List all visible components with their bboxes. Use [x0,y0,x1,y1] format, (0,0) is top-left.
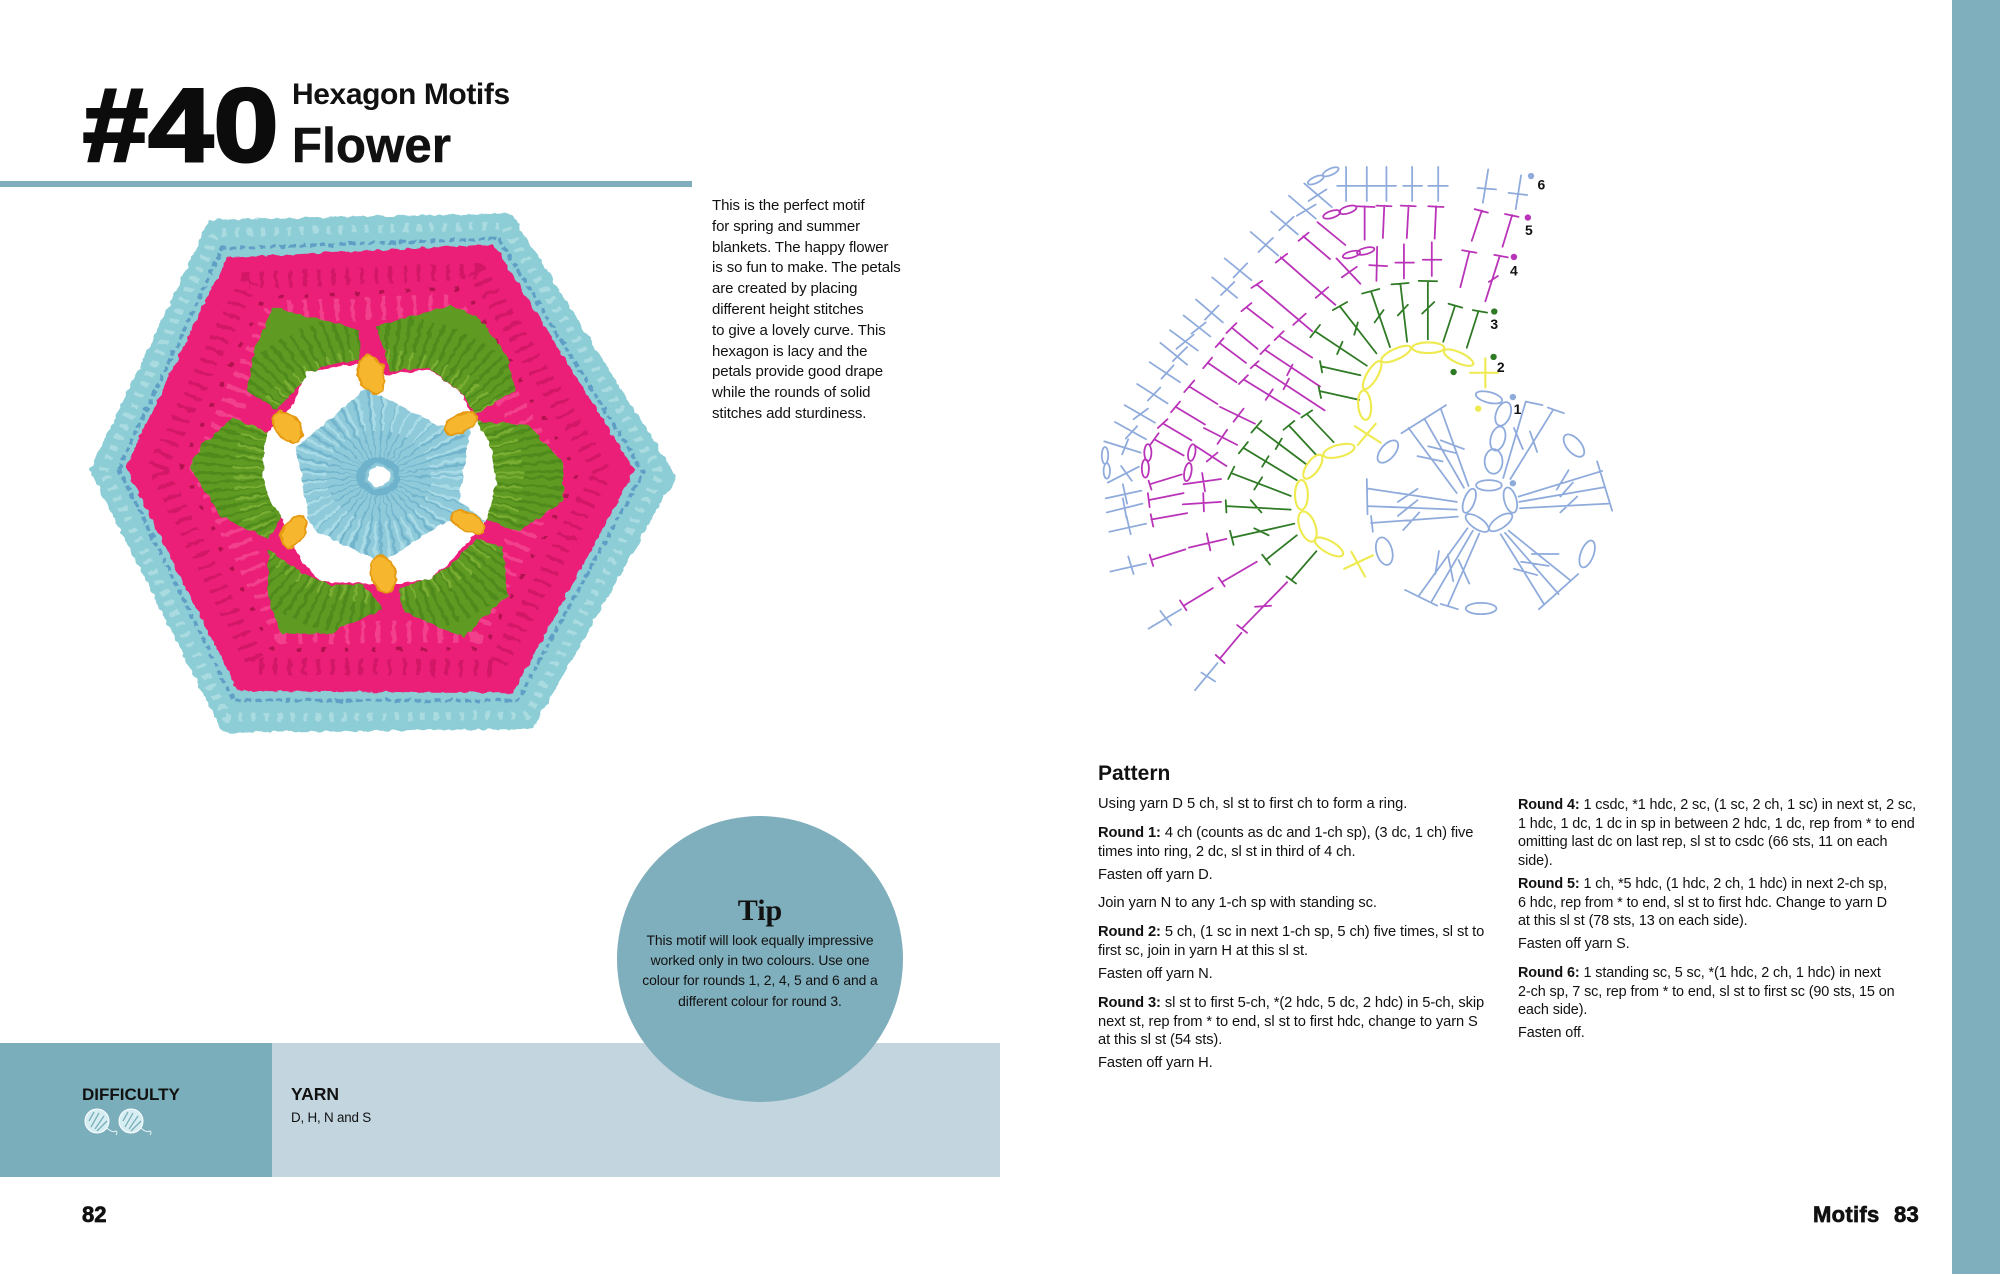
intro text: This is the perfect motif [712,197,865,214]
yellow knots [268,354,489,595]
green petals [190,305,563,638]
icon: yarn balls [84,1108,152,1136]
yarn list: D, H, N and S [291,1110,371,1125]
round 6 [1518,965,1895,1018]
intro text: while the rounds of solid [712,384,870,401]
yarn panel [272,1043,1000,1177]
round 6: each side). [1518,1002,1587,1018]
fasten off N: Fasten off yarn N. [1098,966,1213,982]
outer blue round [94,217,672,730]
round 1: times into ring, 2 dc, sl st in third of 4 ch. [1098,844,1355,860]
pattern column 2 [1518,797,1916,1041]
difficulty panel [0,1043,272,1177]
round 6: 2-ch sp, 7 sc, rep from * to end, sl st to first sc (90 sts, 15 on [1518,984,1895,1000]
round 3: Round 3: sl st to first 5-ch, *(2 hdc, 5 dc, 2 hdc) in 5-ch, skip [1098,995,1484,1011]
fasten off D: Fasten off yarn D. [1098,867,1213,883]
tip text: worked only in two colours. Use one [651,952,869,968]
round 2: Round 2: 5 ch, (1 sc in next 1-ch sp, 5 ch) five times, sl st to [1098,924,1484,940]
foundation: Using yarn D 5 ch, sl st to first ch to form a ring. [1098,796,1407,812]
join N: Join yarn N to any 1-ch sp with standing sc. [1098,895,1377,911]
round 3 stitches: green [1226,281,1487,584]
round 2: first sc, join in yarn H at this sl st. [1098,943,1308,959]
round 4: 1 hdc, 1 dc, 1 dc in sp in between 2 hdc, 1 dc, rep from * to end [1518,816,1915,832]
footer section and page number right: Motifs 83 [1813,1202,1919,1227]
round 5: at this sl st (78 sts, 13 on each side). [1518,913,1748,929]
round 3 [1098,995,1484,1048]
intro text: is so fun to make. The petals [712,259,901,276]
fasten off S: Fasten off yarn S. [1518,936,1630,952]
photo: crocheted hexagon motif [88,212,676,734]
round start markers and numbers: 3 [1490,316,1498,332]
heading rule [0,181,692,187]
pattern column 1 [1098,796,1484,1071]
motif number: #40 [83,68,279,184]
round 4: Round 4: 1 csdc, *1 hdc, 2 sc, (1 sc, 2 ch, 1 sc) in next st, 2 sc, [1518,797,1916,813]
fasten off H: Fasten off yarn H. [1098,1055,1213,1071]
intro text: for spring and summer [712,218,860,235]
round 5: Round 5: 1 ch, *5 hdc, (1 hdc, 2 ch, 1 hdc) in next 2-ch sp, [1518,876,1887,892]
rounds 4 and 5 stitches: magenta [1142,204,1519,663]
intro text [712,197,901,422]
intro text: petals provide good drape [712,363,883,380]
tip text [642,932,878,1009]
round 3: next st, rep from * to end, sl st to first hdc, change to yarn S [1098,1014,1478,1030]
round 3: at this sl st (54 sts). [1098,1032,1222,1048]
difficulty label: DIFFICULTY [82,1085,180,1104]
round 5 [1518,876,1887,929]
round start markers and numbers: 6 [1538,177,1546,192]
intro text: hexagon is lacy and the [712,343,867,360]
yarn label: YARN [291,1084,339,1104]
round 4 [1518,797,1916,869]
blue centre star [296,391,487,562]
round start markers and numbers: 1 [1514,401,1522,417]
crochet chart diagram [1100,166,1613,692]
round 2 stitches: yellow [1295,342,1498,576]
tip heading: Tip [738,894,782,927]
tip circle [617,816,903,1102]
round 6 and round 1 stitches: blue [1102,165,1612,690]
round 2 [1098,924,1484,959]
fasten off: Fasten off. [1518,1025,1585,1041]
round 1 [1098,825,1473,860]
motif title: Flower [292,119,451,173]
right edge colour strip [1952,0,2000,1274]
category heading: Hexagon Motifs [292,78,510,111]
round 6: Round 6: 1 standing sc, 5 sc, *(1 hdc, 2 ch, 1 hdc) in next [1518,965,1881,981]
intro text: different height stitches [712,301,864,318]
round start markers and numbers: 2 [1497,359,1505,375]
tip text: colour for rounds 1, 2, 4, 5 and 6 and a [642,972,878,988]
intro text: are created by placing [712,280,857,297]
pink rounds [125,244,635,693]
round start markers and numbers: 4 [1510,262,1518,278]
intro text: stitches add sturdiness. [712,405,866,422]
round 1: Round 1: 4 ch (counts as dc and 1-ch sp), (3 dc, 1 ch) five [1098,825,1473,841]
round 4: side). [1518,853,1553,869]
white openings [266,366,494,583]
tip text: This motif will look equally impressive [647,932,873,948]
round 4: omitting last dc on last rep, sl st to csdc (66 sts, 11 on each [1518,834,1887,850]
round 5: 6 hdc, rep from * to end, sl st to first hdc. Change to yarn D [1518,895,1887,911]
round start markers and numbers: 5 [1525,222,1533,238]
intro text: blankets. The happy flower [712,239,888,256]
pattern heading: Pattern [1098,762,1170,785]
intro text: to give a lovely curve. This [712,322,886,339]
page number left: 82 [82,1202,106,1227]
round start markers and numbers [1450,173,1546,486]
tip text: different colour for round 3. [678,993,842,1009]
